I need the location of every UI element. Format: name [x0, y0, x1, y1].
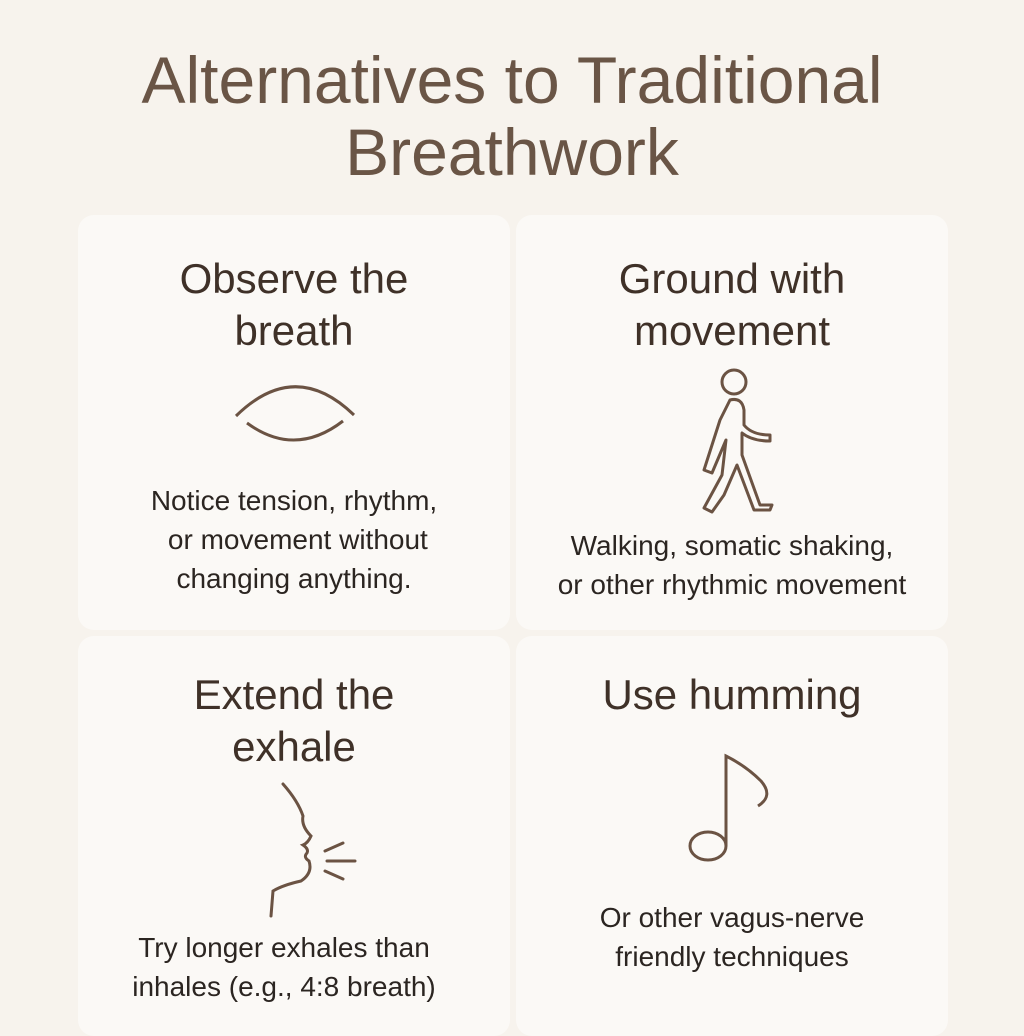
icon: walking person	[702, 368, 774, 514]
text: changing anything.	[176, 563, 412, 594]
text	[600, 902, 864, 972]
heading: breath	[234, 307, 354, 354]
heading	[194, 671, 394, 770]
heading: movement	[634, 307, 830, 354]
panel: humming	[516, 636, 948, 1036]
title: Breathwork	[345, 115, 679, 189]
panel: observe	[78, 215, 510, 630]
icon: music note	[688, 754, 768, 862]
icon: eye	[235, 385, 355, 442]
text: Walking, somatic shaking,	[571, 530, 893, 561]
icon: face exhaling	[270, 782, 356, 918]
text: friendly techniques	[615, 941, 849, 972]
heading: Use humming	[602, 671, 862, 718]
heading: Extend the	[194, 671, 394, 718]
text: inhales (e.g., 4:8 breath)	[132, 971, 436, 1002]
text	[132, 932, 436, 1002]
heading: Ground with	[619, 255, 845, 302]
heading: Observe the	[180, 255, 408, 302]
heading	[619, 255, 845, 354]
heading	[180, 255, 408, 354]
text: Try longer exhales than	[138, 932, 430, 963]
title: Alternatives to Traditional	[141, 43, 883, 117]
text	[151, 485, 437, 594]
panel: exhale	[78, 636, 510, 1036]
heading: exhale	[232, 723, 356, 770]
text: or movement without	[168, 524, 428, 555]
text	[558, 530, 906, 600]
text: Or other vagus-nerve	[600, 902, 864, 933]
text: or other rhythmic movement	[558, 569, 906, 600]
title	[141, 43, 883, 189]
panel: movement	[516, 215, 948, 630]
text: Notice tension, rhythm,	[151, 485, 437, 516]
